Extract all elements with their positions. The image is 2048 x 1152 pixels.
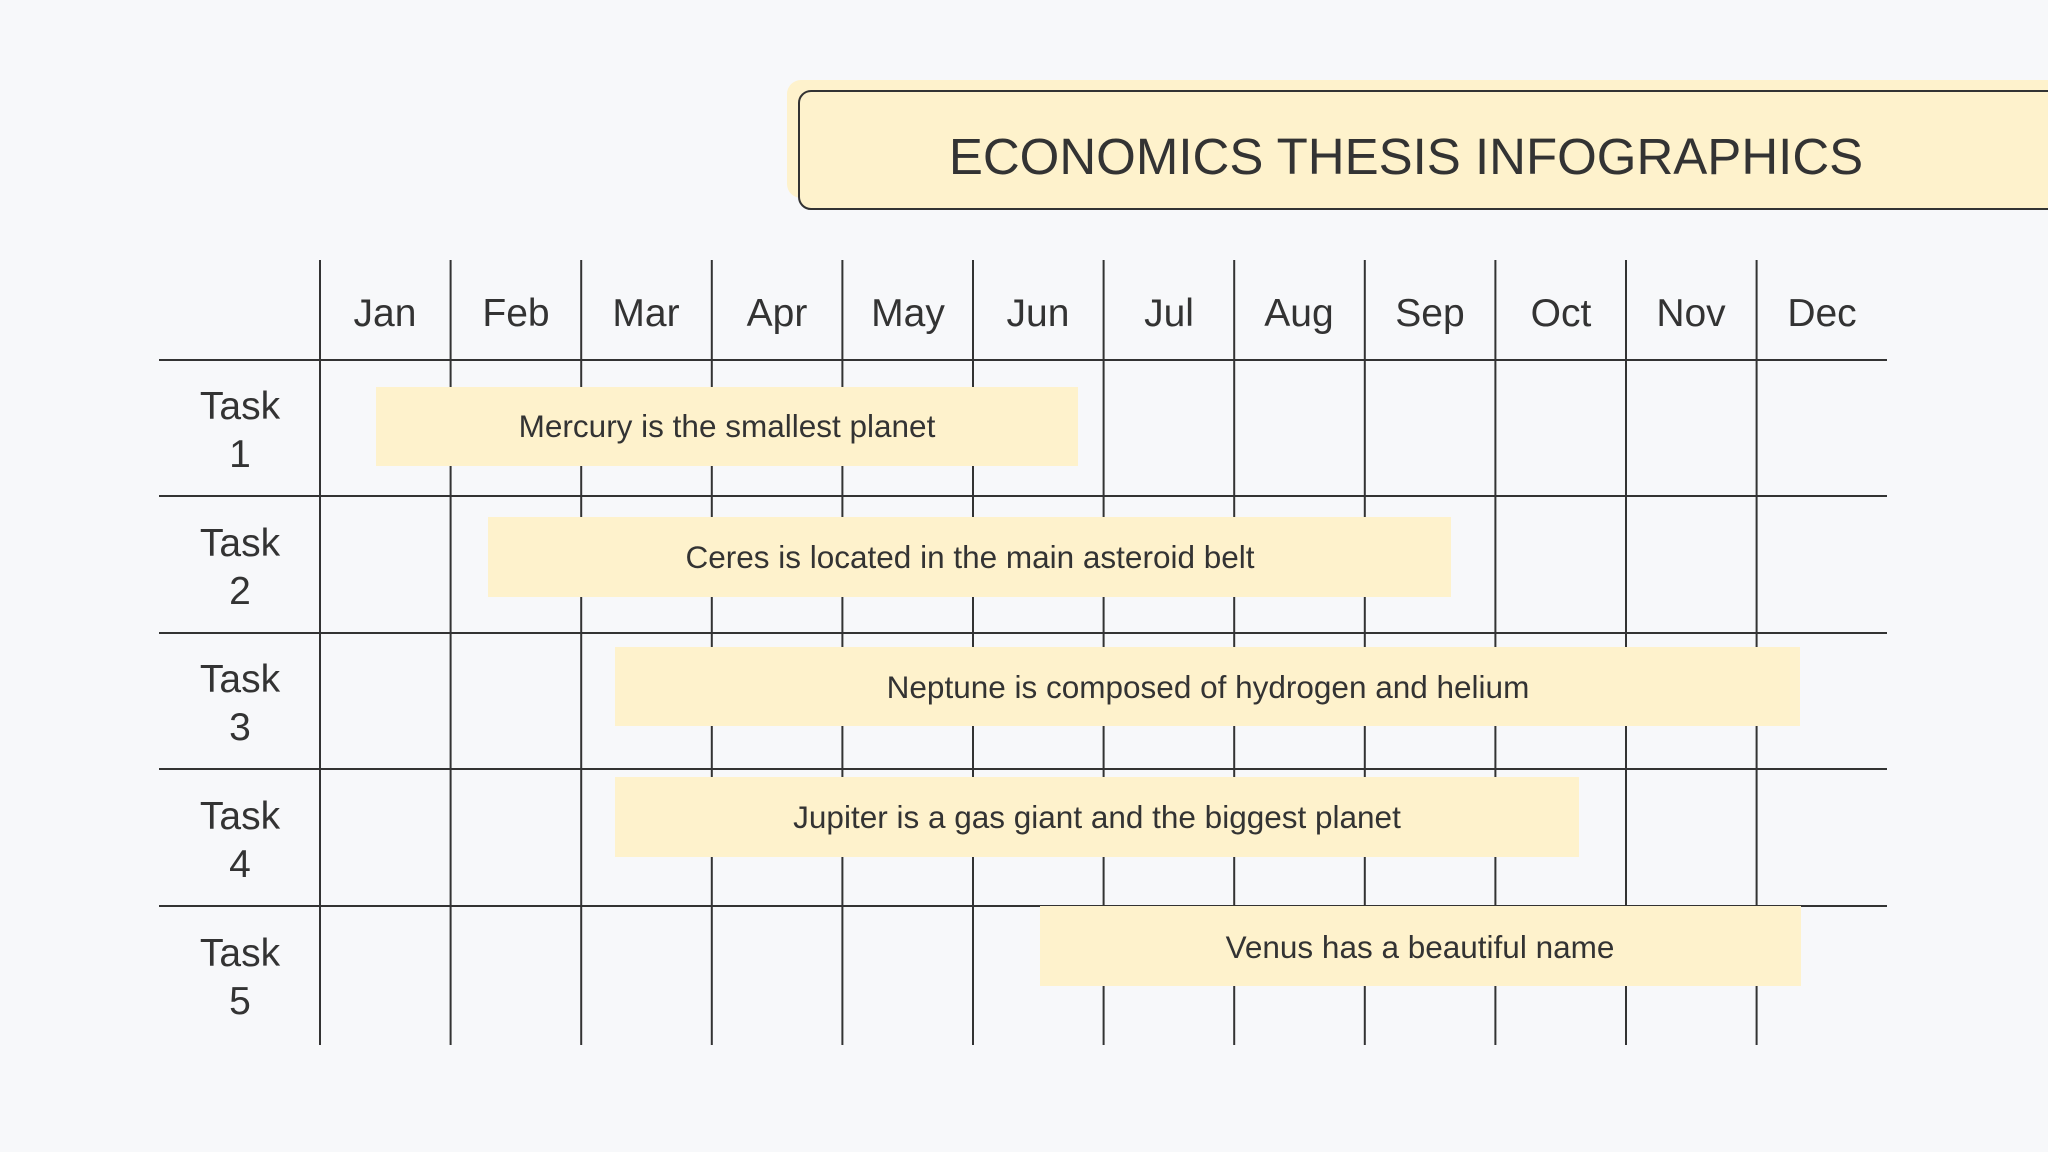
task labels: Task [200,522,281,565]
bar: task 2 [488,517,1451,597]
task labels: Task [200,658,281,701]
task labels: 1 [229,433,251,476]
title: ECONOMICS THESIS INFOGRAPHICS [949,128,1863,185]
month labels: Jan [354,292,416,335]
task labels: 2 [229,570,251,613]
bar: task 5 [1040,906,1801,986]
month labels: Oct [1531,292,1591,335]
task labels: Task [200,932,281,975]
month labels: Aug [1264,292,1334,335]
month labels: Nov [1656,292,1726,335]
gantt grid [159,260,1887,1045]
month labels: May [871,292,945,335]
bar: task 4 [615,777,1579,857]
month labels: Apr [747,292,807,335]
task labels [200,385,281,1023]
month labels: Dec [1787,292,1857,335]
month labels: Sep [1395,292,1465,335]
bar: task 5: Venus has a beautiful name [1226,929,1614,965]
month labels [354,292,1857,335]
month labels: Jun [1007,292,1069,335]
task labels: Task [200,795,281,838]
task labels: 4 [229,843,251,886]
title [787,80,2048,209]
bar: task 1: Mercury is the smallest planet [519,408,936,444]
task labels: Task [200,385,281,428]
bar: task 1 [376,387,1078,466]
month labels: Mar [612,292,680,335]
month labels: Feb [482,292,550,335]
bar: task 3: Neptune is composed of hydrogen and helium [887,669,1529,705]
bar: task 4: Jupiter is a gas giant and the biggest planet [793,799,1401,835]
month labels: Jul [1144,292,1194,335]
task labels: 3 [229,706,251,749]
bar: task 2: Ceres is located in the main asteroid belt [685,539,1255,575]
bar: task 3 [615,647,1800,726]
task labels: 5 [229,980,251,1023]
